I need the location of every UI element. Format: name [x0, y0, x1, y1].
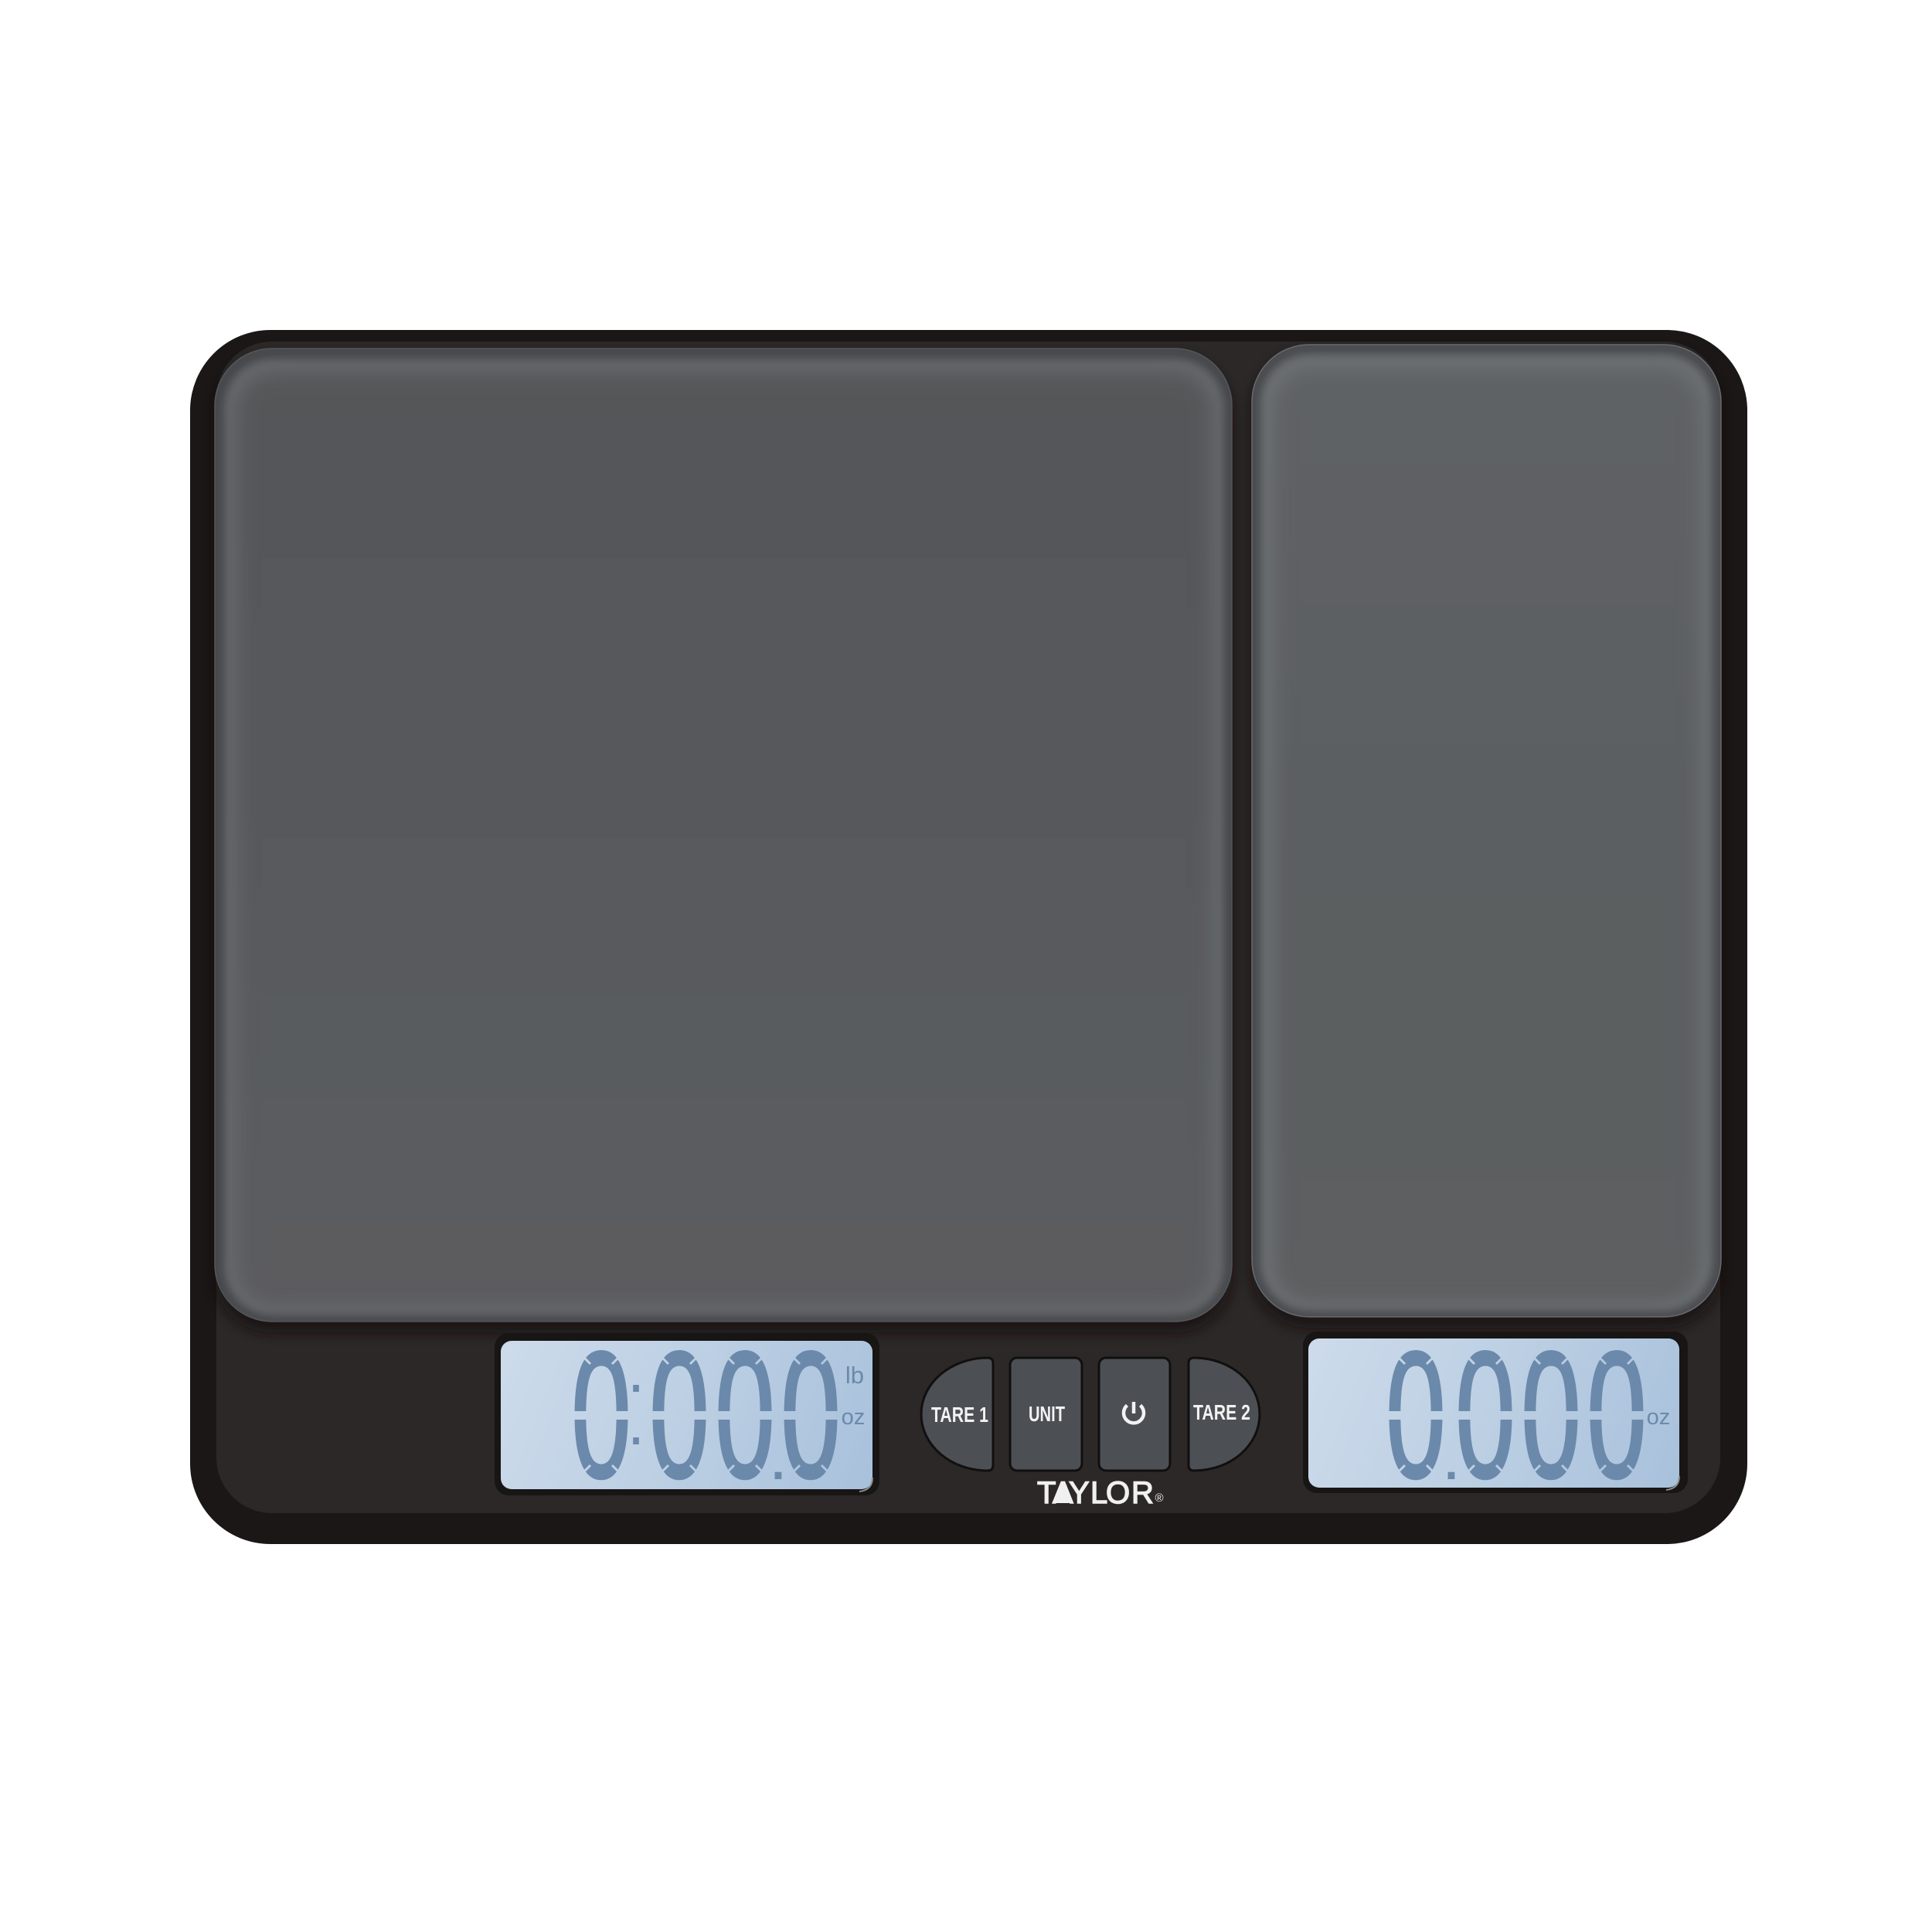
right LCD display: 0: [1386, 1315, 1446, 1515]
left LCD display: lb: [845, 1362, 864, 1389]
panel: right weighing platform: [1252, 345, 1721, 1317]
button: TARE 2: [1189, 1358, 1260, 1471]
right LCD display: .: [1444, 1437, 1458, 1490]
left LCD display: 0: [715, 1315, 775, 1515]
right LCD display: 0: [1521, 1315, 1581, 1515]
left LCD display: oz: [842, 1405, 865, 1430]
left LCD display: 0: [571, 1315, 631, 1515]
right LCD display: oz: [1647, 1405, 1670, 1430]
button: TARE 1: [921, 1358, 993, 1471]
button: TARE 1: TARE 1: [931, 1403, 988, 1427]
button: UNIT: UNIT: [1029, 1402, 1065, 1426]
left LCD display: [495, 1315, 879, 1515]
button: power: [1099, 1358, 1170, 1471]
left LCD display: 0: [781, 1315, 841, 1515]
right LCD display: 0: [1455, 1315, 1515, 1515]
left LCD display: :: [628, 1334, 645, 1475]
right LCD display: 0: [1587, 1315, 1647, 1515]
button: TARE 2: TARE 2: [1193, 1400, 1250, 1424]
scale body: [190, 330, 1747, 1544]
panel: left weighing platform: [215, 349, 1232, 1321]
left LCD display: .: [771, 1437, 785, 1490]
right LCD display: [1303, 1315, 1688, 1515]
left LCD display: 0: [649, 1315, 709, 1515]
brand logo: TAYLOR: TAYLOR: [1037, 1476, 1154, 1510]
brand logo: TAYLOR: ®: [1155, 1492, 1164, 1505]
button: UNIT: [1010, 1358, 1082, 1471]
